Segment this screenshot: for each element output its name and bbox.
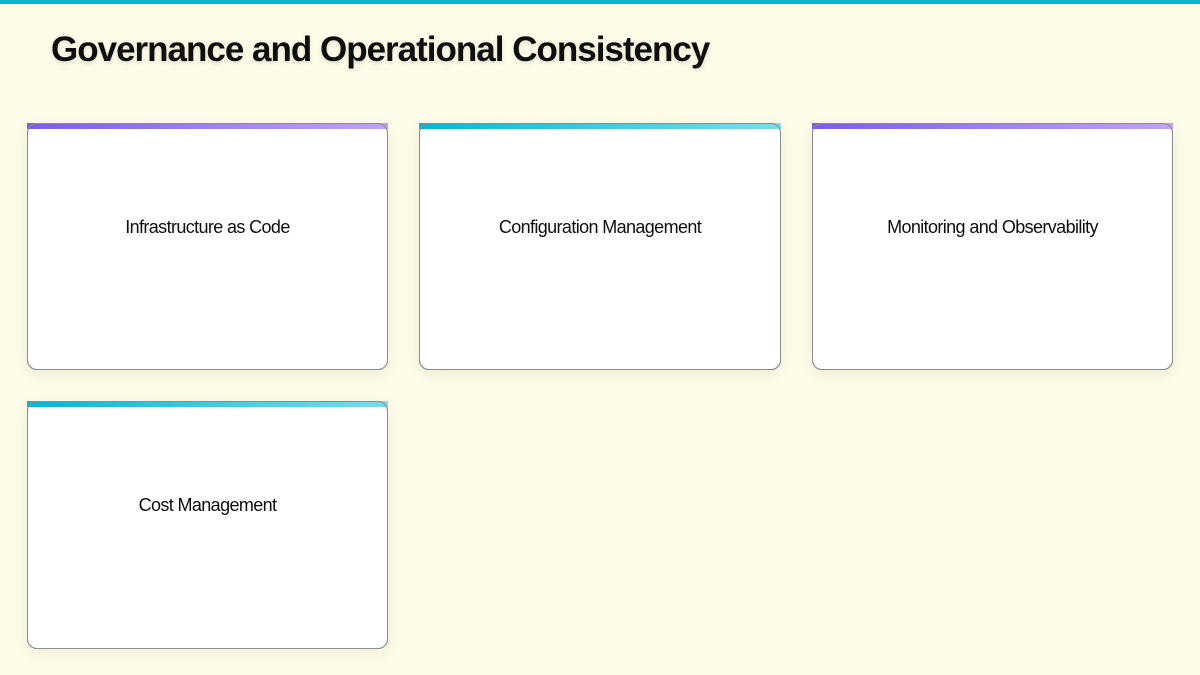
card label: Infrastructure as Code: Infrastructure as Code — [125, 217, 290, 237]
panel: Cost Management — [27, 401, 388, 649]
card label: Monitoring and Observability: Monitoring and Observability — [887, 217, 1098, 237]
purple card accent bar — [27, 123, 388, 129]
panel: Infrastructure as Code — [27, 123, 388, 370]
card outline — [812, 123, 1173, 370]
cyan card accent bar — [27, 401, 388, 407]
cyan card accent bar — [419, 123, 781, 129]
card label: Cost Management: Cost Management — [139, 495, 276, 515]
title: Governance and Operational Consistency — [51, 30, 709, 69]
top accent bar — [0, 0, 1200, 4]
purple card accent bar — [812, 123, 1173, 129]
card outline — [419, 123, 781, 370]
card outline — [27, 123, 388, 370]
panel: Monitoring and Observability — [812, 123, 1173, 370]
panel: Configuration Management — [419, 123, 781, 370]
card outline — [27, 401, 388, 649]
card label: Configuration Management: Configuration Management — [499, 217, 701, 237]
